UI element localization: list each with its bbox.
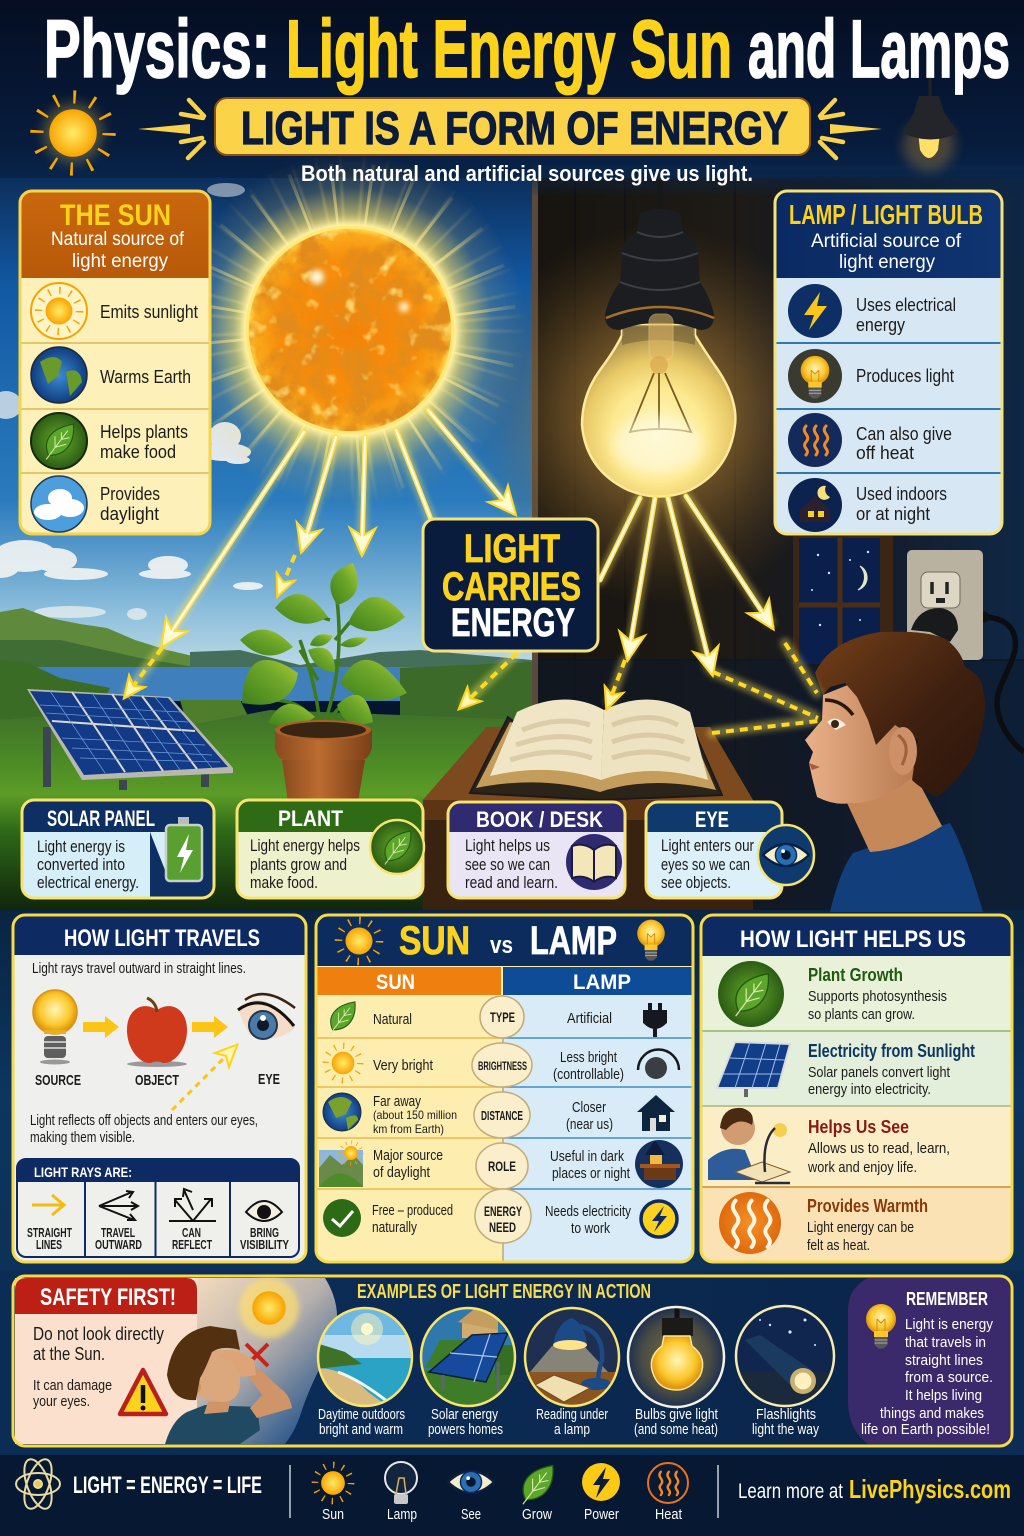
icon row: lamp: Lamp xyxy=(387,1506,417,1523)
lamp bulb illustration xyxy=(582,180,735,496)
column headings: SUN xyxy=(376,971,415,994)
example: bulbs xyxy=(628,1305,724,1438)
arrow xyxy=(83,1016,119,1038)
panel: safety first xyxy=(15,1278,337,1444)
row: provides warmth: felt as heat. xyxy=(807,1237,870,1254)
arrow: reflected ray xyxy=(172,1046,236,1110)
example: flashlights: light the way xyxy=(752,1421,819,1438)
boy looking at the light xyxy=(805,632,985,912)
icon: apple xyxy=(127,998,187,1067)
panel: the sun xyxy=(20,191,210,534)
icon row: power: Power xyxy=(584,1506,619,1523)
card: plant: make food. xyxy=(250,873,318,892)
panel: remember: from a source. xyxy=(905,1369,993,1386)
panel: how light helps us xyxy=(701,915,1012,1262)
icon: battery xyxy=(166,817,202,881)
card: solar panel: Light energy is xyxy=(37,837,125,856)
row: electricity from sunlight: Solar panels convert light xyxy=(808,1064,951,1081)
labels: CAN xyxy=(182,1225,201,1240)
call to action xyxy=(738,1474,1011,1504)
panel: remember xyxy=(848,1278,1010,1444)
row: helps us see: Helps Us See xyxy=(808,1117,909,1137)
row: plant growth: so plants can grow. xyxy=(808,1006,915,1023)
labels: OBJECT xyxy=(135,1072,179,1089)
boy shading his eyes xyxy=(165,1326,292,1444)
card: book / desk: BOOK / DESK xyxy=(476,807,603,832)
card: eye: EYE xyxy=(695,807,729,832)
labels: BRING xyxy=(250,1225,279,1240)
row: type: Natural xyxy=(373,1011,412,1028)
sub-panel: light rays are xyxy=(17,1159,299,1257)
item: warms earth: Warms Earth xyxy=(100,367,191,387)
dark room wall xyxy=(532,178,1024,910)
glow behind rays xyxy=(128,410,817,733)
panel: sun vs lamp xyxy=(316,915,693,1262)
icon: source bulb xyxy=(33,990,77,1064)
row: brightness xyxy=(326,1043,679,1087)
row: role: places or night xyxy=(552,1165,631,1182)
item: produces light: Produces light xyxy=(856,366,954,386)
heading: HOW LIGHT TRAVELS xyxy=(64,925,260,952)
item: uses electrical energy: energy xyxy=(856,315,905,335)
subtitle: Both natural and artificial sources give us light. xyxy=(301,161,753,186)
item: emits sunlight: Emits sunlight xyxy=(100,302,198,322)
heading: vs xyxy=(490,932,513,959)
row: energy need: NEED xyxy=(489,1219,516,1235)
row: role: Major source xyxy=(373,1147,443,1164)
item: uses electrical energy: Uses electrical xyxy=(856,295,956,315)
labels: SOURCE xyxy=(35,1072,81,1089)
row: role: of daylight xyxy=(373,1164,431,1181)
labels xyxy=(35,1071,280,1089)
item: provides daylight: Provides xyxy=(100,484,160,504)
row: electricity from sunlight: energy into electricity. xyxy=(808,1081,931,1098)
icon: book xyxy=(566,834,622,890)
potted plant xyxy=(240,563,407,802)
labels: VISIBILITY xyxy=(240,1237,289,1252)
icon: red cross xyxy=(246,1344,268,1366)
labels: OUTWARD xyxy=(95,1237,142,1252)
row: provides warmth: Provides Warmth xyxy=(807,1196,928,1216)
title: Light Energy Sun xyxy=(286,4,732,95)
heading: HOW LIGHT HELPS US xyxy=(740,926,966,953)
item: produces light xyxy=(788,349,954,403)
row: provides warmth: Light energy can be xyxy=(807,1219,914,1236)
icon row: lamp xyxy=(385,1462,417,1523)
item: used indoors or at night: or at night xyxy=(856,504,930,524)
example: solar energy: powers homes xyxy=(428,1421,503,1438)
labels: REFLECT xyxy=(172,1237,212,1252)
row: role xyxy=(319,1140,683,1189)
subheading: light energy xyxy=(72,251,168,272)
row: helps us see: Allows us to read, learn, xyxy=(808,1140,950,1157)
sky xyxy=(0,178,532,673)
item: helps plants make food: Helps plants xyxy=(100,422,188,442)
icon: straight lines xyxy=(32,1195,64,1215)
solar panel xyxy=(27,689,233,790)
example: daytime outdoors: bright and warm xyxy=(319,1421,403,1438)
row: role: Useful in dark xyxy=(550,1148,624,1165)
item: emits sunlight xyxy=(31,283,198,339)
open book xyxy=(470,699,722,800)
row: brightness: Very bright xyxy=(373,1057,434,1074)
example: flashlights xyxy=(735,1306,835,1438)
row: brightness: BRIGHTNESS xyxy=(478,1059,527,1073)
icon row: grow xyxy=(522,1466,553,1523)
heading xyxy=(338,919,665,963)
icon: can reflect xyxy=(169,1189,216,1221)
icon row: sun: Sun xyxy=(322,1506,344,1523)
lake xyxy=(15,667,415,701)
icon: eye xyxy=(238,994,295,1039)
call to action: Learn more at xyxy=(738,1480,843,1503)
row: distance: DISTANCE xyxy=(481,1108,523,1123)
icon row: grow: Grow xyxy=(522,1506,552,1523)
heading: THE SUN xyxy=(60,199,171,232)
clouds xyxy=(0,183,263,620)
card: eye: eyes so we can xyxy=(661,855,750,874)
panel: remember: life on Earth possible! xyxy=(861,1421,990,1438)
icon: sun xyxy=(239,1278,299,1338)
forest on the far shore and sides xyxy=(0,660,110,730)
panel: lamp / light bulb xyxy=(775,191,1002,534)
sub-panel: light rays are: LIGHT RAYS ARE: xyxy=(34,1164,132,1180)
labels: TRAVEL xyxy=(101,1225,135,1240)
panel: remember: REMEMBER xyxy=(906,1289,988,1309)
callout: light carries energy: ENERGY xyxy=(451,601,575,645)
ray highlights xyxy=(170,410,764,658)
solid rays xyxy=(163,410,772,673)
icon row: see xyxy=(448,1471,494,1523)
row: brightness: Less bright xyxy=(560,1049,618,1066)
row: distance: (near us) xyxy=(566,1116,613,1133)
item: used indoors or at night: Used indoors xyxy=(856,484,947,504)
illustrated scene: daylight landscape on the left, dark room on the right xyxy=(0,165,1024,912)
example: flashlights: Flashlights xyxy=(756,1406,816,1423)
subheading: Artificial source of xyxy=(811,231,962,252)
banner accents xyxy=(138,100,882,158)
card: plant: plants grow and xyxy=(250,855,347,874)
row: energy need: Needs electricity xyxy=(545,1203,631,1220)
heading: LAMP xyxy=(530,919,617,963)
row: energy need: naturally xyxy=(372,1219,417,1236)
slogan: LIGHT = ENERGY = LIFE xyxy=(73,1472,262,1499)
example: reading under a lamp xyxy=(525,1308,625,1438)
item: used indoors or at night xyxy=(788,478,947,532)
footer xyxy=(0,1455,1024,1536)
examples heading: EXAMPLES OF LIGHT ENERGY IN ACTION xyxy=(357,1281,651,1303)
callout: light carries energy xyxy=(423,519,598,651)
intro text: Light rays travel outward in straight lines. xyxy=(32,960,246,977)
item: uses electrical energy xyxy=(788,284,956,338)
column headings xyxy=(376,971,631,994)
item: helps plants make food xyxy=(31,413,188,469)
reflection text: making them visible. xyxy=(30,1129,135,1146)
card: plant: PLANT xyxy=(278,806,343,831)
subheading xyxy=(811,231,962,273)
fade from header into room xyxy=(532,165,1024,197)
pupil xyxy=(257,1205,271,1219)
icon: hanging lamp in header xyxy=(903,78,958,171)
dashed reflected rays xyxy=(125,555,818,733)
row: role: ROLE xyxy=(488,1158,516,1174)
icon: travel outward xyxy=(99,1191,138,1220)
row: energy need xyxy=(323,1189,677,1243)
item: warms earth xyxy=(31,347,191,403)
row: distance: Closer xyxy=(572,1099,606,1116)
icon: sun in header xyxy=(37,97,109,169)
wall outlet and plug xyxy=(907,550,1024,752)
light rays from sun and lamp xyxy=(125,410,818,733)
column headings: LAMP xyxy=(573,971,631,994)
subheading xyxy=(51,229,185,272)
panel: safety first: at the Sun. xyxy=(33,1344,105,1364)
banner: light is a form of energy: LIGHT IS A FORM OF ENERGY xyxy=(241,102,788,154)
icon: leaf xyxy=(370,820,424,874)
panel: how light travels xyxy=(13,915,306,1262)
item: can also give off heat: Can also give xyxy=(856,424,952,444)
card: solar panel: converted into xyxy=(37,855,125,874)
reflection text xyxy=(30,1112,258,1146)
example: daytime outdoors xyxy=(315,1308,415,1438)
row: helps us see xyxy=(708,1108,950,1183)
labels: LINES xyxy=(36,1237,62,1252)
icon row: heat xyxy=(648,1463,688,1523)
subheading: Natural source of xyxy=(51,229,185,250)
item: provides daylight: daylight xyxy=(100,504,159,524)
bottom band xyxy=(13,1276,1012,1446)
arrow xyxy=(192,1016,228,1038)
card: book / desk xyxy=(448,802,625,898)
sun illustration xyxy=(172,152,528,508)
distant hills xyxy=(0,608,247,668)
row: brightness: (controllable) xyxy=(553,1066,624,1083)
row: energy need: Free – produced xyxy=(372,1202,453,1219)
lamp glow xyxy=(468,225,848,605)
title: Physics: xyxy=(44,4,270,95)
item: provides daylight xyxy=(31,476,160,532)
item: helps plants make food: make food xyxy=(100,442,176,462)
example: bulbs: Bulbs give light xyxy=(635,1406,719,1423)
row: energy need: ENERGY xyxy=(484,1203,522,1219)
row: electricity from sunlight xyxy=(717,1041,975,1098)
card: book / desk: read and learn. xyxy=(465,873,558,892)
icon row: power xyxy=(582,1463,620,1523)
callout: light carries energy: LIGHT xyxy=(464,527,560,571)
row: plant growth xyxy=(718,961,947,1027)
card: eye: see objects. xyxy=(661,873,731,892)
icon row: see: See xyxy=(461,1506,481,1523)
icon row: heat: Heat xyxy=(655,1506,683,1523)
panel: remember: things and makes xyxy=(880,1405,984,1422)
row: distance: Far away xyxy=(373,1093,421,1110)
example: reading under a lamp: Reading under xyxy=(536,1406,608,1423)
item: can also give off heat xyxy=(788,413,952,467)
icon row: sun xyxy=(315,1465,351,1523)
card: book / desk: Light helps us xyxy=(465,836,550,855)
row: provides warmth xyxy=(719,1192,928,1254)
row: distance xyxy=(323,1092,675,1138)
card: plant: Light energy helps xyxy=(250,836,360,855)
card: plant xyxy=(237,800,424,898)
panel: remember: straight lines xyxy=(905,1352,983,1369)
row: plant growth: Supports photosynthesis xyxy=(808,988,947,1005)
example: solar energy xyxy=(420,1306,520,1438)
icon: eye xyxy=(758,825,814,885)
card: eye xyxy=(646,802,814,898)
row: type xyxy=(330,996,665,1038)
heading: SUN xyxy=(399,919,470,963)
subheading: light energy xyxy=(839,252,935,273)
panel: safety first: Do not look directly xyxy=(33,1324,164,1344)
labels: STRAIGHT xyxy=(27,1225,72,1240)
labels xyxy=(27,1225,289,1252)
row: distance: km from Earth) xyxy=(373,1122,444,1136)
row: plant growth: Plant Growth xyxy=(808,965,903,985)
icon: atom xyxy=(16,1456,60,1512)
card: book / desk: see so we can xyxy=(465,855,550,874)
example: reading under a lamp: a lamp xyxy=(554,1421,590,1438)
row: type: TYPE xyxy=(490,1009,515,1025)
item: can also give off heat: off heat xyxy=(856,443,914,463)
icon: warning triangle xyxy=(120,1370,166,1414)
example: solar energy: Solar energy xyxy=(431,1406,498,1423)
row: distance: (about 150 million xyxy=(373,1108,457,1122)
row: electricity from sunlight: Electricity from Sunlight xyxy=(808,1041,975,1061)
panel: safety first: your eyes. xyxy=(33,1393,90,1410)
row: helps us see: work and enjoy life. xyxy=(807,1159,917,1176)
card: eye: Light enters our xyxy=(661,836,754,855)
reflection text: Light reflects off objects and enters our eyes, xyxy=(30,1112,258,1129)
panel: remember: that travels in xyxy=(905,1334,986,1351)
callout: light carries energy: CARRIES xyxy=(442,565,581,609)
panel: safety first: SAFETY FIRST! xyxy=(40,1284,176,1311)
icon: bring visibility xyxy=(246,1201,282,1221)
labels: EYE xyxy=(258,1071,280,1088)
card: solar panel: SOLAR PANEL xyxy=(47,806,155,831)
card: solar panel xyxy=(22,800,214,898)
example: daytime outdoors: Daytime outdoors xyxy=(318,1406,405,1423)
card: solar panel: electrical energy. xyxy=(37,873,139,892)
panel: remember: It helps living xyxy=(905,1387,982,1404)
panel: remember: Light is energy xyxy=(905,1316,993,1333)
grass xyxy=(0,710,532,910)
window xyxy=(793,536,893,664)
desk xyxy=(423,727,753,910)
example: bulbs: (and some heat) xyxy=(634,1421,718,1438)
row: energy need: to work xyxy=(571,1220,610,1237)
panel: safety first: It can damage xyxy=(33,1377,112,1394)
row: type: Artificial xyxy=(567,1010,612,1027)
